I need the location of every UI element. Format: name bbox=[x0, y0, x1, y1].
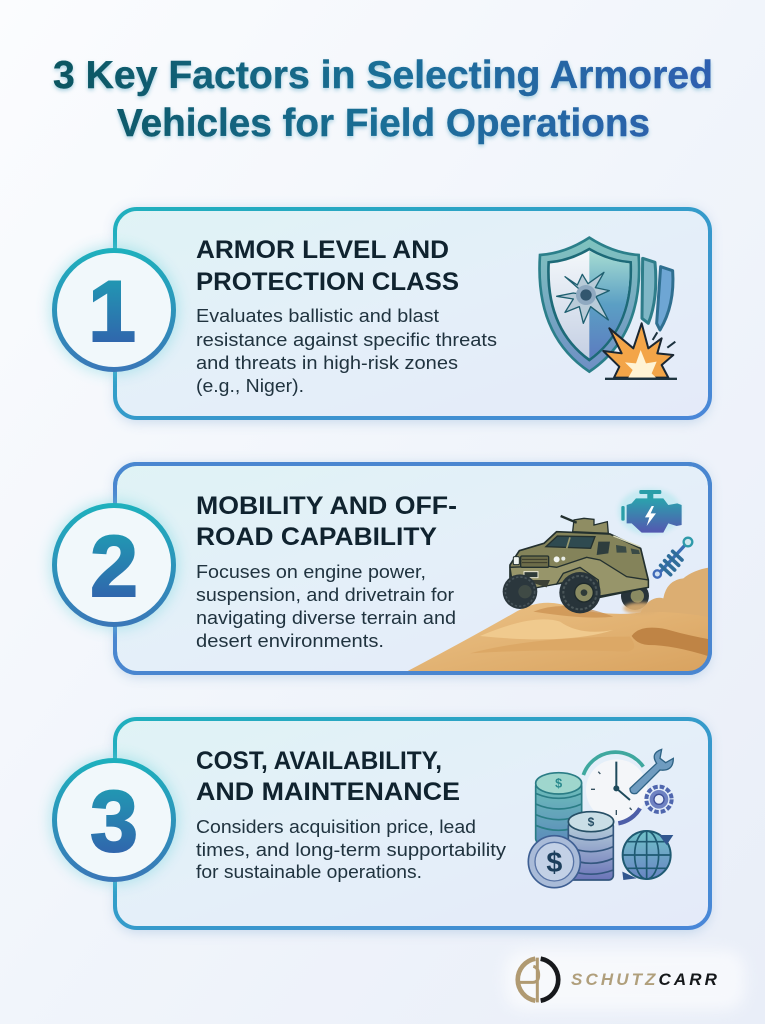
coin stack left: $ bbox=[555, 777, 562, 791]
number badge 1: 1 bbox=[88, 264, 136, 360]
suspension icon bbox=[654, 538, 692, 578]
coin stack right bbox=[568, 812, 614, 880]
title: Vehicles for Field Operations bbox=[117, 104, 650, 147]
panel: mobility bbox=[50, 464, 710, 677]
logo: Schutzcarr bbox=[505, 950, 745, 1010]
number badge 2: 2 bbox=[90, 519, 138, 615]
body text 3 bbox=[196, 816, 507, 882]
body text 2: suspension, and drivetrain for bbox=[196, 584, 454, 605]
body text 1: resistance against specific threats bbox=[196, 329, 497, 350]
title: Vehicles for Field Operations bbox=[117, 102, 650, 145]
gear bbox=[646, 787, 672, 812]
title: 3 Key Factors in Selecting Armored bbox=[53, 56, 713, 99]
dust over rear wheel bbox=[623, 602, 660, 614]
body text 1 bbox=[196, 305, 497, 396]
heading 2 bbox=[196, 492, 457, 551]
number badge 3: 3 bbox=[90, 774, 138, 870]
body text 3: for sustainable operations. bbox=[196, 861, 422, 882]
body text 3: Considers acquisition price, lead bbox=[196, 816, 476, 837]
front wheels bbox=[503, 574, 537, 609]
number badge 1 bbox=[50, 246, 178, 374]
body text 1: and threats in high-risk zones bbox=[196, 352, 458, 373]
dollar coin bbox=[528, 836, 580, 888]
body text 2 bbox=[196, 561, 456, 651]
coin stack right: $ bbox=[588, 815, 595, 829]
body text 1: Evaluates ballistic and blast bbox=[196, 305, 439, 326]
heading 3: COST, AVAILABILITY, bbox=[196, 747, 442, 775]
turret bbox=[573, 518, 608, 533]
body text 2: desert environments. bbox=[196, 630, 384, 651]
heading 3: AND MAINTENANCE bbox=[196, 778, 460, 806]
dust cloud bbox=[640, 568, 708, 617]
heading 3 bbox=[196, 747, 460, 806]
logo mark bbox=[517, 958, 558, 1002]
number badge 3 bbox=[50, 756, 178, 884]
body text 3: times, and long-term supportability bbox=[196, 839, 507, 860]
illustration: armored vehicle on dune bbox=[403, 488, 710, 673]
heading 1: PROTECTION CLASS bbox=[196, 268, 459, 296]
panel: cost bbox=[50, 719, 710, 932]
globe bbox=[622, 831, 673, 880]
heading 2: ROAD CAPABILITY bbox=[196, 523, 437, 551]
engine icon bbox=[618, 488, 682, 535]
body text 1: (e.g., Niger). bbox=[196, 375, 304, 396]
sand dune bbox=[403, 603, 710, 673]
icon: shield with blast bbox=[540, 238, 677, 380]
dollar coin: $ bbox=[546, 847, 562, 879]
wrench bbox=[630, 749, 673, 794]
icon: coins, clock, tools, globe bbox=[528, 749, 673, 888]
title: 3 Key Factors in Selecting Armored bbox=[53, 54, 713, 97]
logo wordmark: SCHUTZCARR bbox=[571, 970, 720, 989]
number badge 2 bbox=[50, 501, 178, 629]
body text 2: navigating diverse terrain and bbox=[196, 607, 456, 628]
coin stack left bbox=[536, 773, 582, 843]
title bbox=[53, 54, 713, 147]
heading 1 bbox=[196, 236, 459, 296]
body bbox=[510, 532, 648, 597]
heading 1: ARMOR LEVEL AND bbox=[196, 236, 449, 264]
panel: armor level bbox=[50, 209, 710, 422]
clock bbox=[583, 752, 647, 823]
body text 2: Focuses on engine power, bbox=[196, 561, 426, 582]
heading 2: MOBILITY AND OFF- bbox=[196, 492, 457, 520]
rear wheel bbox=[621, 588, 649, 610]
